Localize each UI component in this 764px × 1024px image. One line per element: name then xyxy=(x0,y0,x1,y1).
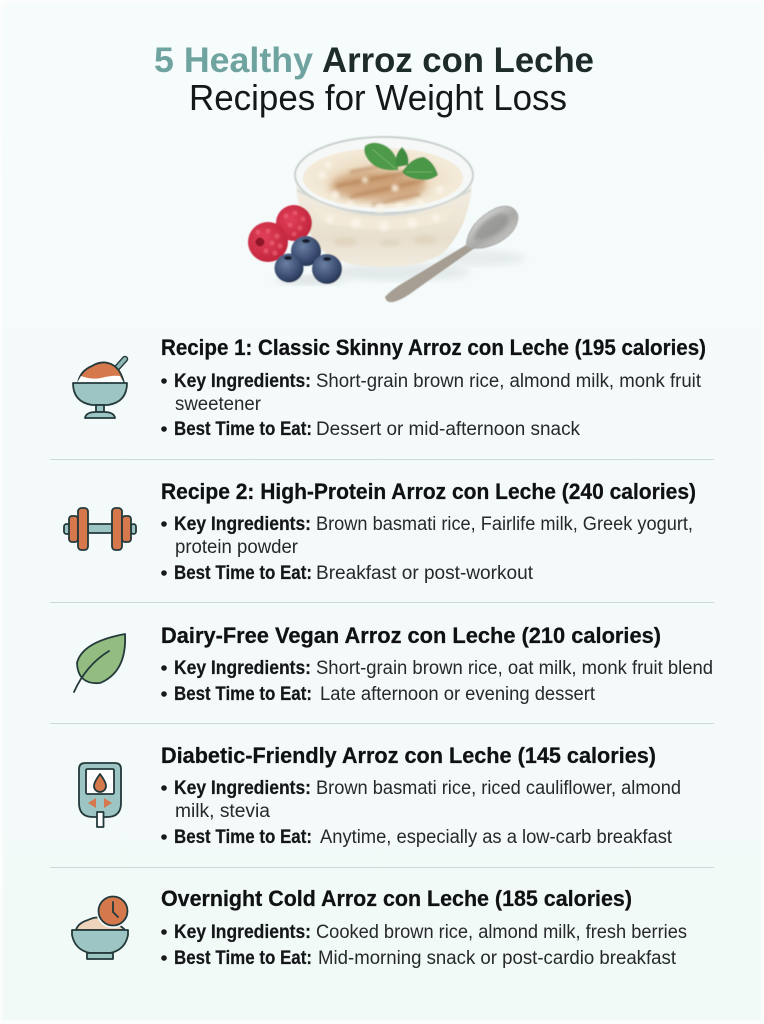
icon: rice pudding cup xyxy=(73,359,127,418)
key ingredients: Key Ingredients: xyxy=(174,371,311,392)
heading: Recipe 1: Classic Skinny Arroz con Leche (195 calories) xyxy=(161,335,706,360)
key ingredients xyxy=(161,922,687,943)
key ingredients: sweetener xyxy=(175,394,262,415)
icon: dumbbell xyxy=(64,508,136,550)
best time to eat xyxy=(161,684,596,705)
best time to eat: Best Time to Eat: xyxy=(174,948,312,969)
best time to eat: Mid-morning snack or post-cardio breakfast xyxy=(318,948,677,969)
best time to eat: Best Time to Eat: xyxy=(174,563,312,584)
best time to eat xyxy=(161,827,673,848)
icon: leaf xyxy=(74,634,125,692)
best time to eat: Anytime, especially as a low-carb breakfast xyxy=(320,827,673,848)
heading: Dairy-Free Vegan Arroz con Leche (210 calories) xyxy=(161,623,661,648)
recipe 2 xyxy=(64,479,696,584)
key ingredients xyxy=(161,514,693,558)
key ingredients: Cooked brown rice, almond milk, fresh berries xyxy=(316,922,687,943)
best time to eat xyxy=(161,563,534,584)
key ingredients: Brown basmati rice, riced cauliflower, almond xyxy=(316,778,681,799)
blueberries xyxy=(274,236,342,284)
heading: Overnight Cold Arroz con Leche (185 calories) xyxy=(161,886,632,911)
raspberries xyxy=(248,205,312,262)
title: 5 Healthy xyxy=(154,41,314,80)
title xyxy=(154,41,594,118)
key ingredients: Key Ingredients: xyxy=(174,514,311,535)
hero photo: bowl of rice pudding with berries and spoon xyxy=(248,137,525,302)
recipe 1 xyxy=(73,335,706,440)
title: Recipes for Weight Loss xyxy=(189,77,567,118)
key ingredients: Brown basmati rice, Fairlife milk, Greek yogurt, xyxy=(316,514,693,535)
best time to eat xyxy=(161,419,580,440)
best time to eat: Best Time to Eat: xyxy=(174,684,312,705)
key ingredients: Key Ingredients: xyxy=(174,778,311,799)
best time to eat xyxy=(161,948,677,969)
key ingredients xyxy=(161,778,681,822)
key ingredients: Short-grain brown rice, almond milk, monk fruit xyxy=(316,371,702,392)
spoon xyxy=(385,206,518,302)
key ingredients: milk, stevia xyxy=(175,801,270,822)
recipe 4 xyxy=(79,743,681,848)
best time to eat: Best Time to Eat: xyxy=(174,827,312,848)
recipe 3 xyxy=(74,623,713,705)
heading: Recipe 2: High-Protein Arroz con Leche (240 calories) xyxy=(161,479,696,504)
key ingredients: protein powder xyxy=(175,537,299,558)
icon: glucose meter xyxy=(79,763,121,827)
key ingredients: Short-grain brown rice, oat milk, monk fruit blend xyxy=(316,658,713,679)
best time to eat: Late afternoon or evening dessert xyxy=(320,684,596,705)
heading: Diabetic-Friendly Arroz con Leche (145 calories) xyxy=(161,743,656,768)
icon: bowl with clock xyxy=(72,894,130,959)
key ingredients: Key Ingredients: xyxy=(174,658,311,679)
best time to eat: Dessert or mid-afternoon snack xyxy=(316,419,580,440)
best time to eat: Best Time to Eat: xyxy=(174,419,312,440)
mint leaves xyxy=(364,143,438,180)
title: Arroz con Leche xyxy=(322,41,594,80)
glass bowl xyxy=(295,137,473,267)
best time to eat: Breakfast or post-workout xyxy=(316,563,534,584)
key ingredients xyxy=(161,371,702,415)
recipe 5 xyxy=(72,886,687,969)
key ingredients: Key Ingredients: xyxy=(174,922,311,943)
